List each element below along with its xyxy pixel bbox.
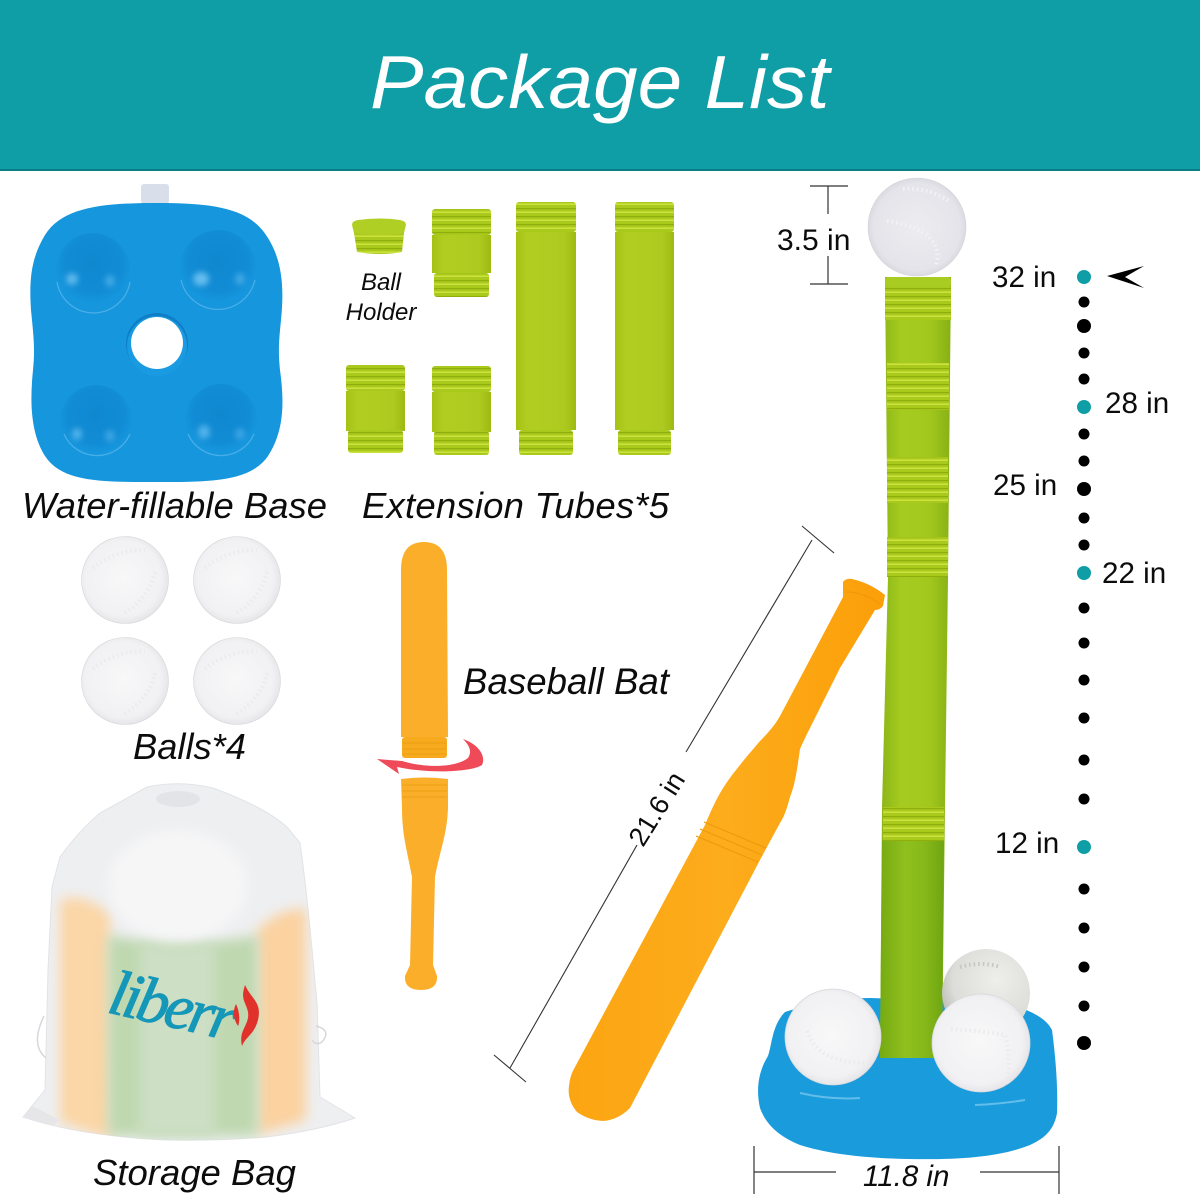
label: baseball bat: Baseball Bat [463,661,671,702]
icon: contents seen through the bag [24,891,314,1140]
panel: assembled tee set [569,178,1057,1159]
height label 32 in: 32 in [992,261,1056,294]
dimension: ball 3.5 in: 3.5 in [777,224,850,257]
icon: drawstring loops [37,1016,326,1058]
height label 12 in: 12 in [995,827,1059,860]
label: holder: Holder [346,299,417,326]
icon: short tube lower left [346,365,405,453]
icon: red rotation arrow [377,739,483,774]
icon: long tube 1 [516,202,576,455]
panel: balls [82,536,280,767]
icon: short tube lower right [432,366,491,455]
dimension: base 11.8 in [754,1146,1059,1194]
height label 22 in: 22 in [1102,557,1166,590]
dimension: ball 3.5 in [777,186,850,284]
label: balls: Balls*4 [133,726,246,767]
dimension: bat 21.6 in [494,526,834,1082]
panel: baseball bat in two pieces [377,542,671,990]
icon: blue base top view [30,203,282,482]
height label 25 in: 25 in [993,469,1057,502]
icon: base [758,998,1057,1159]
icon: large bat [569,579,885,1121]
icon: pole [880,277,951,1058]
label: water-fillable base: Water-fillable Base [22,485,327,526]
icon: ball 2 [194,536,280,624]
icon: ball 3 [82,638,168,724]
label: extension tubes: Extension Tubes*5 [362,485,670,526]
title: Package List [370,41,833,124]
dimension: base 11.8 in: 11.8 in [863,1160,949,1193]
icon: ball 4 [194,638,280,724]
icon: front left ball on base [785,989,881,1085]
icon: ball on holder [868,178,966,276]
icon: long tube 2 [615,202,674,455]
icon: bat lower half [401,778,448,990]
icon: short tube top [432,209,491,297]
icon: logo flame [234,985,259,1046]
icon: bat upper half [401,542,448,758]
dimension: bat 21.6 in: 21.6 in [623,767,691,851]
icon: drawstring bag body [23,784,355,1140]
logo: liberr: liberr [103,956,245,1055]
arrow: pointing at 32 in dot [1107,266,1144,288]
panel: extension tubes [346,202,674,526]
title banner [0,0,1200,171]
icon: ball 1 [82,536,168,624]
label: storage bag: Storage Bag [93,1152,296,1193]
icon: bag neck [156,791,200,807]
icon: ball holder [352,218,406,254]
panel: water-fillable base [22,184,327,526]
label: ball holder: Ball [361,269,402,296]
icon: front right ball on base [932,994,1030,1092]
height scale dots [1077,270,1091,1050]
panel: storage bag [20,784,355,1193]
height label 28 in: 28 in [1105,387,1169,420]
icon: fill cap [141,184,169,204]
icon: rear ball on base [942,949,1030,1037]
